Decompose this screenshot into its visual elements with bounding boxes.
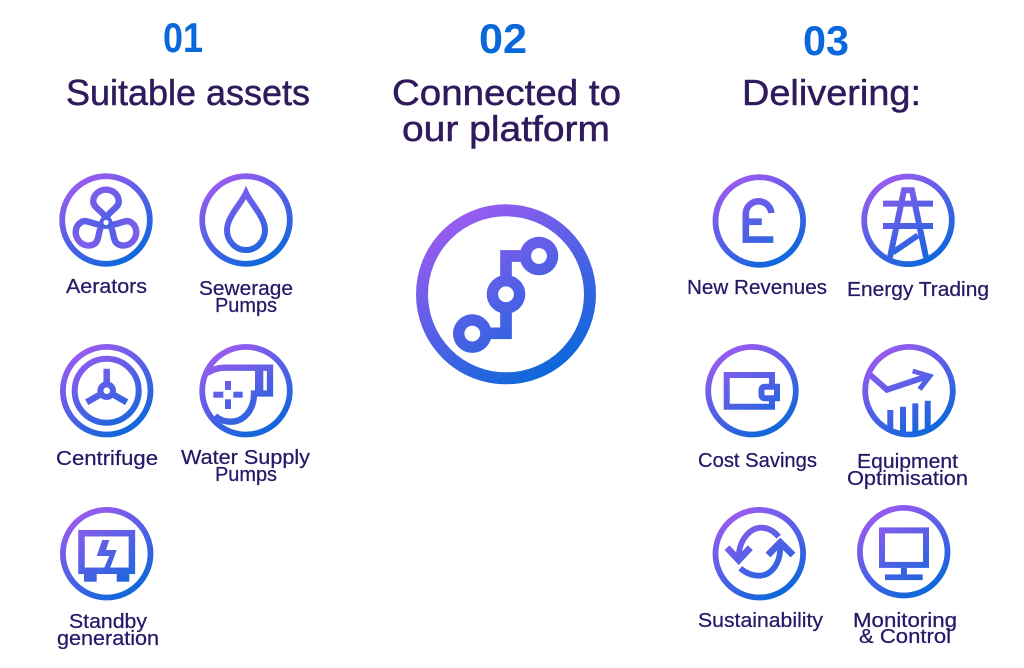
icon: fan — [62, 176, 150, 264]
label: Sewerage Pumps: Pumps — [215, 295, 277, 317]
asset: Aerators — [62, 176, 150, 298]
benefit: Equipment Optimisation — [847, 347, 968, 490]
icon: centrifuge wheel — [63, 347, 151, 434]
benefit: Energy Trading — [847, 176, 989, 301]
icon: platform network nodes — [422, 210, 590, 378]
label: New Revenues: New Revenues — [687, 277, 827, 299]
column 3 heading: Delivering — [742, 17, 921, 113]
number 01: 01 — [163, 14, 203, 61]
icon: water drop — [202, 176, 290, 264]
icon: wallet — [708, 347, 796, 434]
label: Monitoring & Control: Monitoring — [853, 610, 957, 632]
label: Water Supply Pumps: Pumps — [215, 464, 277, 486]
number 02: 02 — [479, 15, 527, 62]
benefit: Sustainability — [698, 510, 823, 632]
benefit: New Revenues — [687, 177, 827, 299]
title: Connected to our platform: Connected to — [392, 72, 621, 113]
label: Cost Savings: Cost Savings — [698, 450, 817, 472]
column 1 heading: Suitable assets — [66, 14, 310, 113]
icon: generator — [63, 510, 151, 598]
icon: trend arrow with bars — [865, 347, 953, 434]
label: Sewerage Pumps: Sewerage — [199, 278, 293, 300]
label: Equipment Optimisation: Optimisation — [847, 468, 968, 490]
icon: pound sign — [716, 177, 803, 265]
label: Aerators: Aerators — [66, 276, 147, 298]
icon: volute pump — [202, 347, 290, 434]
label: Water Supply Pumps: Water Supply — [181, 447, 310, 469]
icon: computer monitor — [860, 508, 948, 596]
label: Sustainability: Sustainability — [698, 610, 823, 632]
column 2 heading: Connected to our platform — [392, 15, 621, 149]
label: Equipment Optimisation: Equipment — [857, 451, 958, 473]
title: Suitable assets: Suitable assets — [66, 72, 310, 113]
title: Connected to our platform: our platform — [402, 108, 610, 149]
label: Standby generation: generation — [57, 628, 159, 650]
number 03: 03 — [803, 17, 849, 64]
icon: electricity pylon — [864, 176, 952, 264]
asset: Sewerage Pumps — [199, 176, 293, 317]
icon: circular arrows — [716, 510, 803, 598]
asset: Water Supply Pumps — [181, 347, 310, 486]
benefit: Cost Savings — [698, 347, 817, 472]
benefit: Monitoring & Control — [853, 508, 957, 648]
label: Centrifuge: Centrifuge — [56, 448, 158, 470]
asset: Standby generation — [57, 510, 159, 650]
label: Energy Trading: Energy Trading — [847, 279, 989, 301]
label: Standby generation: Standby — [69, 611, 147, 633]
label: Monitoring & Control: & Control — [859, 626, 951, 648]
asset: Centrifuge — [56, 347, 158, 470]
title: Delivering: Delivering: — [742, 72, 921, 113]
